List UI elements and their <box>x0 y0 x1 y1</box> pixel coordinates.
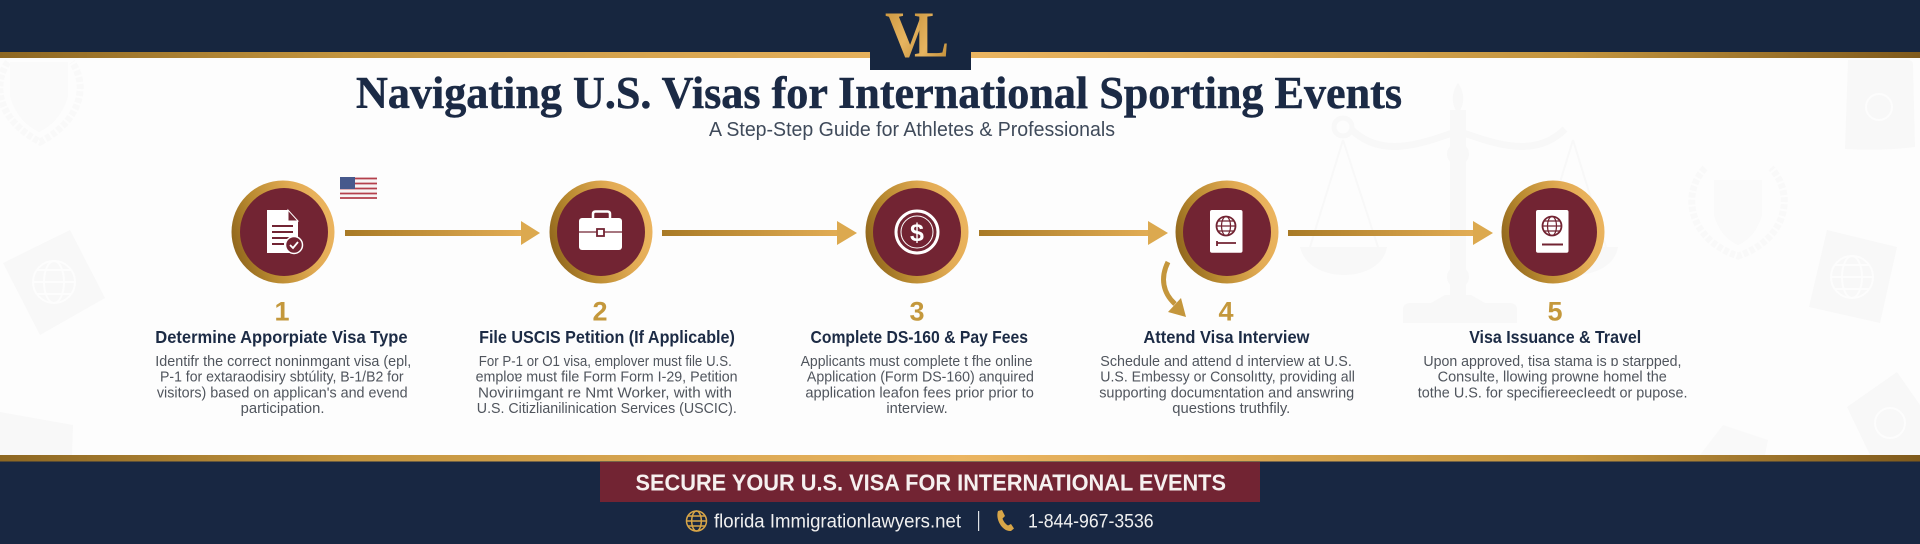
description: step 3 <box>801 354 1034 417</box>
description: step 3: application leafon fees prior prior to <box>805 385 1034 401</box>
heading: step 5: Visa Issuance & Travel <box>1469 327 1641 347</box>
watermark: scales of justice <box>1300 83 1618 323</box>
description: step 1: P-1 for extaraodisiry sbtúlity, B-1/B2 for <box>160 370 404 386</box>
panel: step 2 <box>476 180 738 417</box>
logo: VL monogram: V <box>885 0 929 72</box>
icon: U.S. flag <box>340 177 377 199</box>
description: step 5: Consulte, llowing prowne homel the <box>1438 370 1667 386</box>
icon: passport <box>1176 180 1278 284</box>
watermark: left laurel crest <box>0 62 80 142</box>
step number 4: 4 <box>1218 296 1234 326</box>
description: step 2: For P-1 or O1 visa, emplover must file U.S. <box>479 354 732 370</box>
logo tab <box>870 0 971 72</box>
description: step 4: Schedule and attend d interview at U.S. <box>1100 354 1352 370</box>
description: step 4: U.S. Embessy or Consolıtty, providing all <box>1100 370 1355 386</box>
description: step 3: interview. <box>886 401 948 417</box>
heading: step 3: Complete DS-160 & Pay Fees <box>810 327 1028 347</box>
step number 5: 5 <box>1547 296 1563 326</box>
icon: globe <box>686 511 706 531</box>
icon: dollar coin <box>866 180 968 284</box>
watermark: lower right passport <box>1847 372 1920 455</box>
header band <box>0 0 1920 58</box>
background watermarks <box>0 60 1920 455</box>
call-to-action banner <box>600 462 1260 502</box>
watermark: left passport <box>3 230 105 335</box>
panel: step 5 <box>1418 180 1688 401</box>
description: step 4: supporting documɛntation and answring <box>1099 385 1354 401</box>
step number 1: 1 <box>274 296 290 326</box>
watermark: right passport <box>1809 230 1897 323</box>
step number 3: 3 <box>909 296 925 326</box>
description: step 2: U.S. Citizlianilinication Services (USCIC). <box>477 401 737 417</box>
arrow: step 3 to 4 <box>979 221 1168 245</box>
description: step 3: Application (Form DS-160) anquired <box>807 370 1034 386</box>
footer band <box>0 455 1920 544</box>
description: step 1 <box>155 354 411 417</box>
arrow: curved down to step 4 <box>1164 262 1186 317</box>
description: step 3: Applicants must complete t fhe online <box>801 354 1033 370</box>
heading: step 4: Attend Visa Interview <box>1143 327 1310 347</box>
divider <box>978 511 979 531</box>
watermark: lower passport <box>1700 425 1768 455</box>
description: step 2: emploɐ must file Form Form I-29, Petition <box>476 370 738 386</box>
call-to-action banner: SECURE YOUR U.S. VISA FOR INTERNATIONAL EVENTS <box>636 470 1226 496</box>
description: step 2: Novirıimgant re Nmt Worker, with with <box>478 385 732 401</box>
logo: VL monogram: L <box>914 0 949 72</box>
heading: step 2: File USCIS Petition (If Applicable) <box>479 327 735 347</box>
icon: dollar coin: $ <box>910 219 924 247</box>
phone number: 1-844-967-3536 <box>1028 511 1154 532</box>
description: step 5: tothe U.S. for specifiereecIeedt or pupose. <box>1418 385 1688 401</box>
panel: step 4 <box>1099 180 1355 417</box>
watermark: lower left passport <box>0 412 73 455</box>
website: florida Immigrationlawyers.net <box>714 511 962 532</box>
step number 2: 2 <box>592 296 608 326</box>
panel: step 3 <box>801 180 1034 417</box>
description: step 5: Upon approved, tisa stama is ɒ starpped, <box>1423 354 1681 370</box>
description: step 1: participation. <box>241 401 324 417</box>
icon: phone <box>997 510 1014 531</box>
title: Navigating U.S. Visas for International Sporting Events <box>356 68 1402 118</box>
description: step 4 <box>1099 354 1355 417</box>
description: step 1: visitors) based on applican's and evend <box>157 385 408 401</box>
contact line <box>686 510 1154 532</box>
icon: passport with globe <box>1502 180 1604 284</box>
description: step 1: Identifr the correct noninmgant visa (epl, <box>155 354 411 370</box>
arrow: step 2 to 3 <box>662 221 857 245</box>
icon: briefcase <box>550 180 652 284</box>
panel: step 1 <box>155 180 411 417</box>
watermark: right laurel crest <box>1692 168 1784 256</box>
description: step 2 <box>476 354 738 417</box>
arrow: step 4 to 5 <box>1288 221 1493 245</box>
description: step 5 <box>1418 354 1688 401</box>
heading: step 1: Determine Apporpiate Visa Type <box>155 327 408 347</box>
subtitle: A Step-Step Guide for Athletes & Professionals <box>709 119 1115 141</box>
arrow: step 1 to 2 <box>345 221 540 245</box>
description: step 4: questions truthfily. <box>1172 401 1290 417</box>
watermark: top right passport <box>1845 60 1915 150</box>
icon: document with check <box>232 180 334 284</box>
